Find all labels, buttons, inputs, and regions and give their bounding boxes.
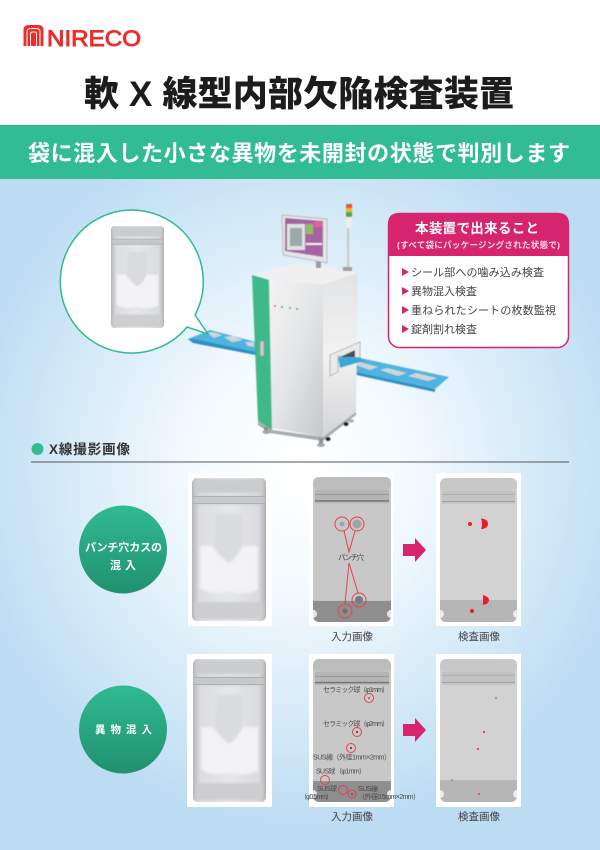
package photo: [193, 659, 266, 802]
logo: NIRECO: [24, 25, 141, 51]
category circle: [79, 506, 167, 594]
title: 軟 X 線型内部欠陥検査装置: [84, 74, 514, 114]
annotation: ceramic 1mm: セラミック球（φ1mm）: [323, 685, 389, 694]
image annotation: パンチ穴: [338, 553, 364, 562]
panel header: [388, 213, 569, 256]
callout bubble: [60, 210, 208, 353]
photo backing: [187, 654, 272, 807]
blue gradient backdrop: [0, 179, 600, 850]
caption: input image: 入力画像: [331, 630, 374, 643]
annotation: 0.5mm: （φ0.5mm）: [300, 793, 333, 801]
output image backing: [436, 473, 521, 626]
left conveyor: [188, 330, 256, 355]
annotation: SUS wire label: SUS線: [358, 784, 378, 793]
annotation: SUS wire: SUS線（外径1mm×2mm）: [313, 752, 391, 762]
caption: input image: 入力画像: [331, 810, 374, 823]
package photo: [192, 478, 266, 621]
photo backing: [188, 473, 272, 626]
panel body: [388, 214, 568, 348]
output image: [436, 659, 521, 802]
logo wordmark: NIRECO: [47, 26, 141, 51]
door handle: [260, 341, 264, 356]
caption: inspection image: 検査画像: [458, 630, 500, 643]
annotation: outer diameter: （外径0.5mm×2mm）: [358, 792, 420, 801]
annotation: ceramic 2mm: セラミック球（φ2mm）: [323, 719, 389, 728]
icon: logo arches: [24, 25, 44, 46]
inspection machine illustration: [188, 204, 449, 447]
row 2: foreign matter: [79, 654, 521, 823]
cabinet top: [252, 263, 358, 285]
defect markers: [335, 517, 366, 618]
green door strip: [252, 275, 272, 430]
input image: [309, 477, 395, 622]
cabinet side: [323, 273, 358, 437]
caption: inspection image: 検査画像: [458, 810, 500, 823]
cabinet front: [269, 279, 323, 437]
monitor: [282, 215, 327, 268]
arrow: [403, 718, 426, 742]
list item 1: シール部への噛み込み検査: [411, 265, 544, 279]
annotation: SUS ball: SUS球: [317, 784, 337, 793]
list item 2: 異物混入検査: [411, 284, 477, 298]
category circle: [79, 686, 167, 774]
callout: zoomed package: [60, 210, 208, 353]
list item 3: 重ねられたシートの枚数監視: [411, 303, 556, 317]
indicator lights: [274, 305, 298, 310]
banner band: [0, 125, 600, 179]
banner text: 袋に混入した小さな異物を未開封の状態で判別します: [28, 141, 570, 166]
input image backing: [309, 654, 394, 807]
category label: パンチ穴カスの: [85, 540, 162, 554]
category label line 2: 混 入: [110, 558, 136, 572]
panel: capabilities: [388, 213, 569, 348]
package photo: [111, 226, 164, 328]
cabinet plinth: [258, 412, 356, 441]
section title: X線撮影画像: [49, 441, 130, 457]
output image: [436, 478, 521, 622]
list item 4: 錠剤割れ検査: [411, 322, 477, 336]
green banner: [0, 125, 600, 179]
input image backing: [309, 473, 393, 626]
section bullet: [32, 443, 44, 455]
section heading: X-ray images: [31, 441, 569, 462]
input image: [300, 659, 420, 802]
row 1: punch hole debris: [79, 473, 521, 643]
annotation: SUS ball 1mm: SUS球（φ1mm）: [316, 766, 366, 776]
category label: 異物混入: [95, 723, 152, 736]
output image backing: [436, 654, 521, 807]
conveyor exit opening: [330, 342, 366, 376]
signal tower lamp: [343, 204, 352, 271]
right conveyor: [338, 356, 449, 392]
panel subheading: (すべて袋にパッケージングされた状態で): [397, 240, 560, 250]
machine feet: [262, 420, 354, 447]
arrow: [403, 538, 426, 562]
panel heading: 本装置で出来ること: [415, 220, 539, 236]
